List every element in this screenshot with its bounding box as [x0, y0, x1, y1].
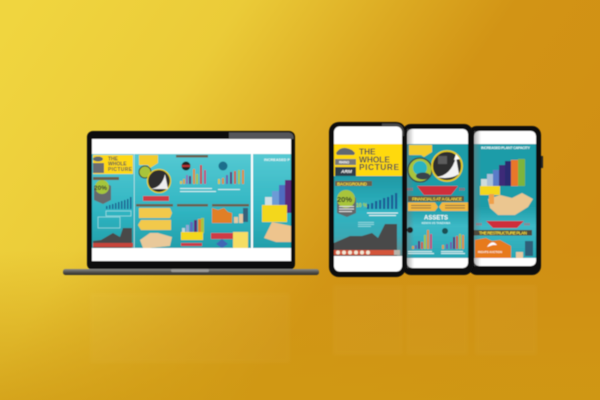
title block: PICTURE — [108, 167, 133, 173]
plant illustration — [140, 233, 172, 248]
hexagon stat: 20% — [337, 195, 352, 204]
heading — [359, 147, 399, 172]
side button — [541, 156, 543, 168]
yellow callout — [480, 186, 500, 195]
gauge circle — [432, 151, 462, 181]
right chart — [441, 228, 465, 254]
20% hexagon — [94, 180, 111, 204]
laptop infographic second panel: INCREASED P — [264, 158, 290, 162]
heading: WHOLE — [359, 154, 390, 164]
phone 2 — [402, 124, 473, 275]
left yellow arrow — [408, 202, 438, 211]
laptop infographic first panel — [92, 154, 251, 248]
screen shade — [474, 131, 481, 266]
note boxes — [106, 211, 131, 216]
laptop screen — [92, 139, 291, 261]
20% hexagon: 20% — [94, 185, 107, 192]
small ring — [139, 166, 151, 178]
column divider — [133, 154, 136, 248]
financials heading: FINANCIALS AT A GLANCE — [412, 196, 462, 202]
dark swoosh — [487, 242, 497, 247]
hexagon stat — [337, 190, 356, 217]
logo blocks — [335, 159, 356, 165]
ring icon — [408, 158, 432, 182]
lid highlight — [229, 132, 294, 139]
phone body — [402, 124, 473, 275]
red strip with counter — [334, 250, 400, 255]
left chart — [407, 227, 434, 254]
phone 3: THE RESTRUCTURE PLAN — [479, 230, 527, 236]
plant capacity bars — [181, 218, 204, 246]
teal area — [407, 144, 468, 258]
phone body — [468, 126, 541, 275]
note card — [233, 232, 248, 248]
yellow arrows — [139, 208, 172, 218]
growth label: 10 % — [356, 203, 368, 209]
title block: WHOLE — [108, 162, 127, 168]
laptop — [63, 131, 319, 275]
assets subheading: KENYA VS TANZANIA — [422, 221, 450, 225]
screen shade — [407, 129, 414, 268]
red banner — [143, 196, 169, 201]
gauge circle — [148, 170, 170, 192]
red strip — [93, 243, 133, 247]
rhino logo — [336, 148, 355, 155]
phone highlight — [382, 124, 404, 136]
heading: PICTURE — [359, 162, 399, 172]
phone screen — [334, 126, 402, 272]
yellow callout — [139, 155, 158, 168]
red banner — [486, 221, 524, 228]
title panel: ARM — [340, 169, 353, 175]
dark skyline — [334, 224, 397, 256]
trackpad notch — [171, 269, 209, 272]
teal panel — [334, 176, 402, 256]
heading: THE — [359, 147, 376, 157]
title panel — [334, 144, 402, 176]
chevrons and banner: ‹‹‹ — [407, 187, 413, 193]
caption box — [367, 212, 398, 216]
chevrons and banner: ››› — [459, 187, 465, 193]
assets panel charts — [180, 162, 244, 192]
laptop base — [63, 269, 319, 275]
title panel: RHINO — [339, 160, 350, 164]
teal area — [474, 144, 536, 258]
growth bars — [106, 197, 132, 209]
rights caption: RIGHTS AUCTION — [478, 250, 502, 254]
title block: THE — [108, 156, 119, 162]
chevrons: ‹‹‹ — [476, 222, 482, 228]
heading: INCREASED PLANT CAPACITY — [481, 146, 530, 150]
assets heading: ASSETS — [424, 216, 448, 222]
phone 3: ››› — [524, 222, 530, 228]
laptop lid — [87, 131, 295, 270]
right yellow arrow — [439, 202, 468, 211]
note text — [358, 222, 374, 227]
phone screen — [407, 129, 468, 268]
chevrons and banner — [407, 186, 465, 195]
title block — [93, 155, 133, 174]
orange chart — [475, 238, 511, 258]
section headings — [176, 155, 208, 158]
skyline — [93, 228, 132, 248]
blue tile — [216, 239, 228, 248]
phone screen — [474, 131, 536, 266]
background heading: BACKGROUND — [337, 182, 368, 186]
orange chart — [212, 208, 232, 223]
capacity bars — [481, 159, 525, 186]
phone 1 — [329, 122, 406, 277]
laptop infographic second panel — [253, 154, 291, 248]
phone 3 — [468, 126, 543, 275]
yellow callout — [409, 145, 432, 157]
reflections under devices — [90, 285, 537, 363]
restructure heading — [474, 230, 532, 236]
background heading — [93, 177, 119, 180]
phone body — [329, 122, 406, 277]
plant illustration — [488, 193, 533, 215]
growth bars — [367, 193, 397, 209]
small building — [525, 241, 533, 256]
